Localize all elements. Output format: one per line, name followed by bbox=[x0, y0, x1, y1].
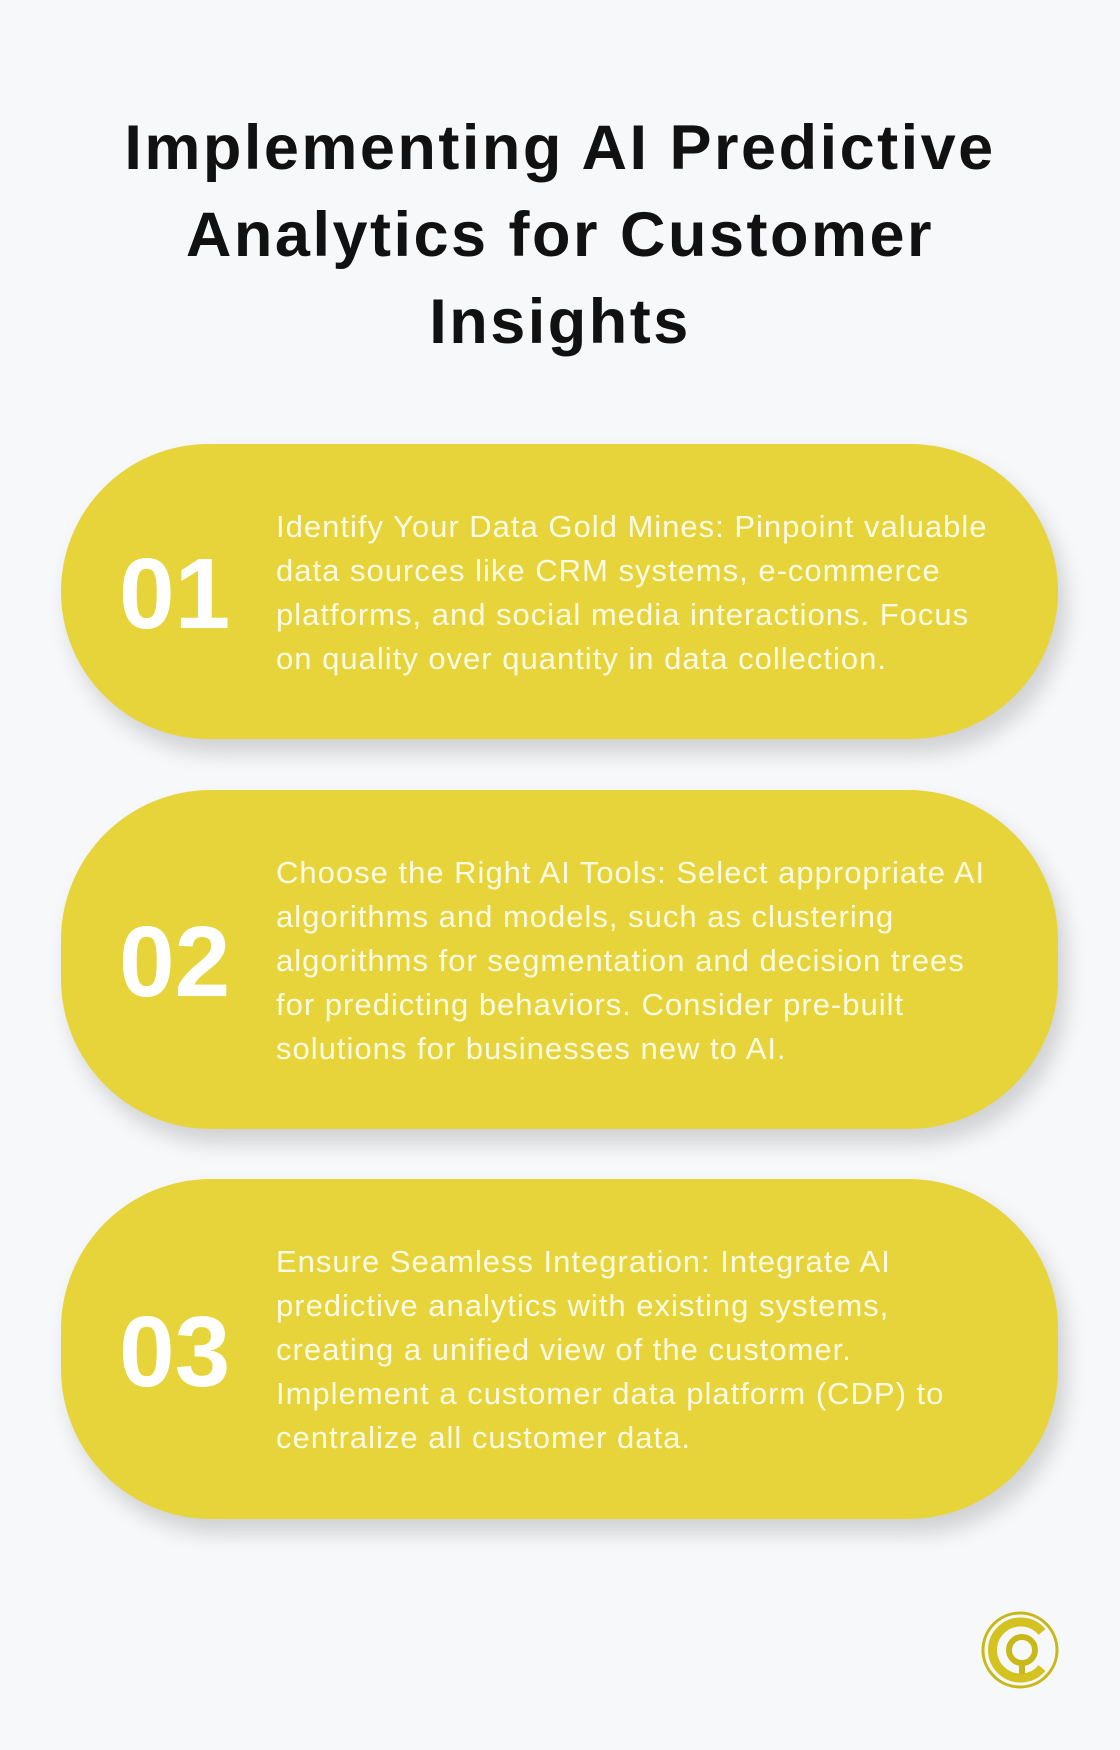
text: step 01: Identify Your Data Gold Mines: Pinpoint valuable bbox=[276, 508, 987, 544]
text: step 02: solutions for businesses new to AI. bbox=[276, 1030, 787, 1066]
text: step 01 bbox=[276, 508, 987, 676]
icon: logo bbox=[982, 1612, 1058, 1688]
number 02: 02 bbox=[119, 906, 230, 1018]
text: step 02: algorithms for segmentation and decision trees bbox=[276, 942, 965, 978]
text: step 02: Choose the Right AI Tools: Select appropriate AI bbox=[276, 854, 985, 890]
text: step 02: algorithms and models, such as clustering bbox=[276, 898, 894, 934]
text: step 01: data sources like CRM systems, e-commerce bbox=[276, 552, 941, 588]
text: step 02 bbox=[276, 854, 985, 1066]
number 03: 03 bbox=[119, 1296, 230, 1408]
text: step 03: Ensure Seamless Integration: Integrate AI bbox=[276, 1244, 891, 1279]
title: Implementing AI Predictive bbox=[124, 113, 996, 183]
text: step 01: platforms, and social media interactions. Focus bbox=[276, 596, 969, 632]
text: step 03 bbox=[276, 1244, 944, 1455]
panel: step 02 bbox=[61, 790, 1058, 1129]
number 01: 01 bbox=[119, 538, 230, 650]
text: step 03: centralize all customer data. bbox=[276, 1420, 691, 1455]
title bbox=[124, 113, 996, 357]
title: Insights bbox=[429, 287, 691, 357]
text: step 02: for predicting behaviors. Consider pre-built bbox=[276, 986, 904, 1022]
text: step 03: Implement a customer data platform (CDP) to bbox=[276, 1376, 944, 1411]
title: Analytics for Customer bbox=[186, 200, 934, 270]
panel: step 01 bbox=[61, 444, 1058, 739]
text: step 03: predictive analytics with existing systems, bbox=[276, 1288, 889, 1323]
panel: step 03 bbox=[61, 1179, 1058, 1519]
text: step 01: on quality over quantity in data collection. bbox=[276, 640, 887, 676]
text: step 03: creating a unified view of the customer. bbox=[276, 1332, 852, 1367]
